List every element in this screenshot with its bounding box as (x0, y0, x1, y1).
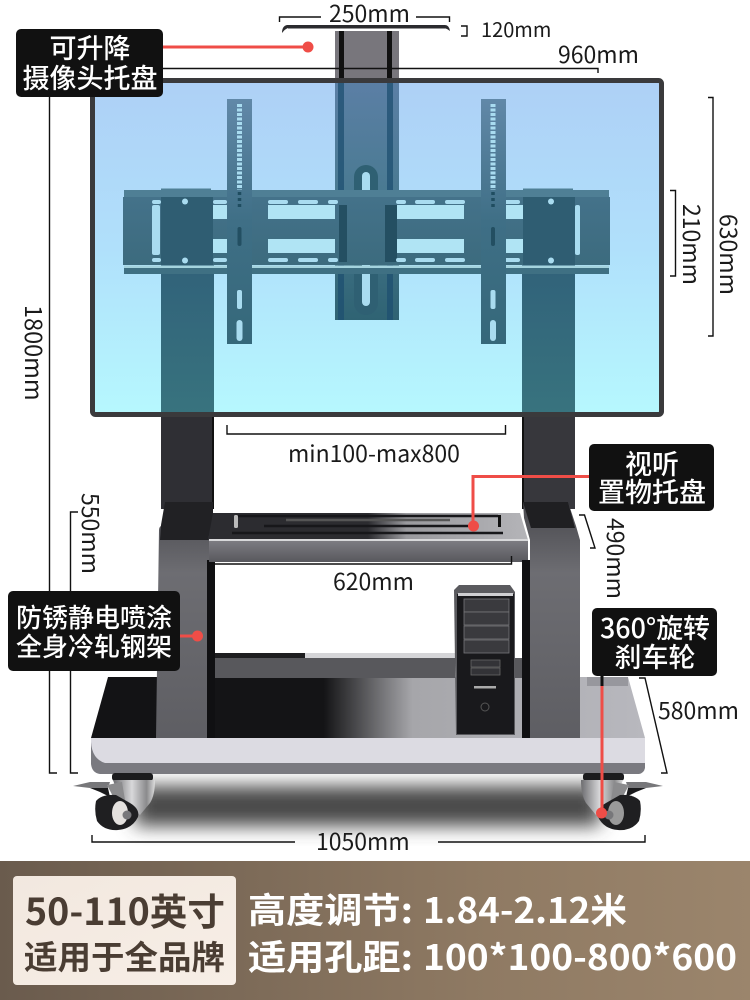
dimension: 210mm: 210mm (676, 204, 710, 285)
callout: AV shelf: 置物托盘 (598, 471, 706, 510)
dimension: 580mm: 580mm (658, 692, 739, 726)
size card (13, 876, 236, 985)
size card: 50-110英寸 (25, 882, 225, 936)
callout: camera tray: 可升降 (50, 27, 130, 66)
right adjustable arm (481, 99, 506, 344)
callout: camera tray (16, 27, 314, 97)
left caster (73, 773, 155, 830)
spec: hole spacing: 100*100-800*600 (423, 930, 737, 981)
callout: camera tray: 摄像头托盘 (22, 57, 158, 96)
dimension: min100-max800: min100-max800 (288, 435, 460, 469)
callout: caster: 360°旋转 (600, 607, 710, 646)
callout: caster: 刹车轮 (614, 636, 696, 675)
stand uprights below screen (161, 414, 575, 509)
spec: height: 高度调节: (248, 883, 413, 934)
callout: AV shelf: 视听 (625, 443, 679, 482)
base platform (91, 677, 645, 774)
dimension: 550mm: 550mm (75, 493, 109, 574)
PC tower (454, 585, 515, 735)
spec: height (248, 883, 627, 934)
floor shadow (135, 786, 600, 826)
footer band (0, 861, 750, 1000)
dimension: 1050mm: 1050mm (316, 823, 410, 857)
dimension: 960mm: 960mm (558, 36, 639, 70)
callout: steel frame: 全身冷轧钢架 (16, 627, 172, 664)
central column behind screen (335, 83, 399, 320)
spec: height: 1.84-2.12米 (423, 883, 627, 934)
spec: hole spacing: 适用孔距: (248, 930, 413, 981)
dimension: 630mm: 630mm (713, 214, 747, 295)
mounting rail (123, 188, 610, 274)
right caster (581, 773, 663, 830)
callout: steel frame (8, 591, 203, 671)
dimension lines (50, 17, 713, 842)
top column (335, 31, 399, 79)
left adjustable arm (227, 99, 252, 344)
spec: hole spacing (248, 930, 737, 981)
AV shelf (208, 513, 528, 562)
callout: steel frame: 防锈静电喷涂 (16, 598, 172, 635)
mount uprights behind screen (161, 265, 575, 412)
dimension: 620mm: 620mm (333, 563, 414, 597)
callout: caster (592, 607, 717, 818)
dimension: 1800mm: 1800mm (18, 305, 52, 401)
size card: 适用于全品牌 (24, 931, 225, 979)
camera tray (282, 25, 450, 33)
callout: AV shelf (468, 443, 714, 532)
lower shelf bar (215, 653, 525, 678)
right leg (522, 502, 580, 738)
left leg (156, 502, 215, 738)
TV screen (92, 80, 662, 414)
dimension: 490mm: 490mm (600, 518, 634, 599)
dimension: 120mm: 120mm (481, 14, 551, 43)
